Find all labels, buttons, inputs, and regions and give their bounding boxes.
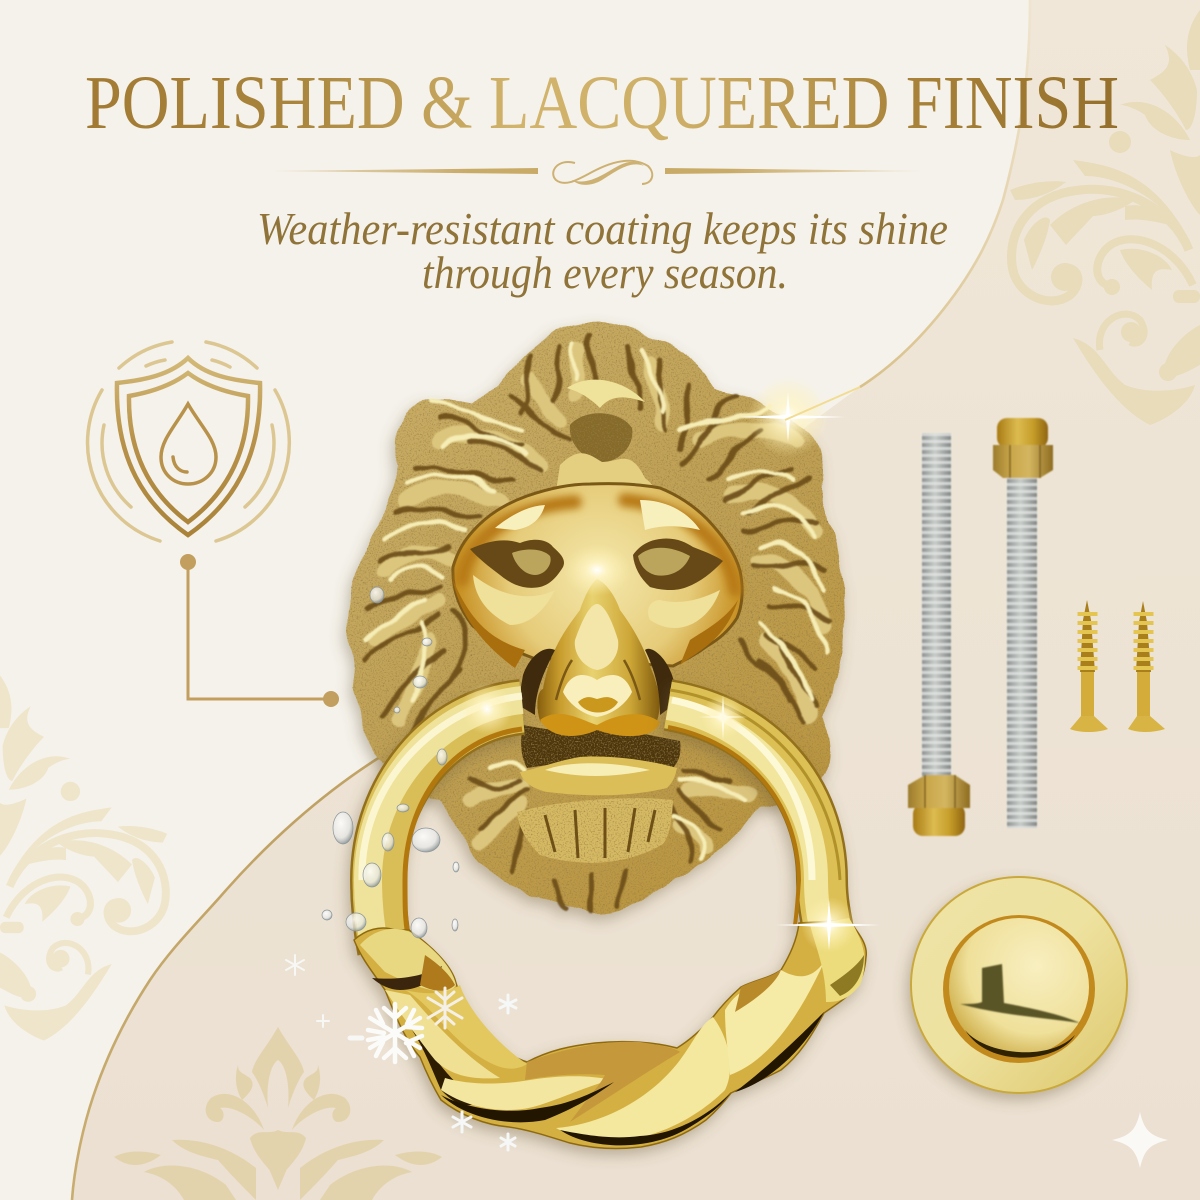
subtitle [257,204,948,298]
callout connector line [180,554,339,707]
mane highlight strands [365,345,825,860]
ring: twisted lower section [354,918,866,1148]
door knocker ring [354,690,866,1148]
decorative star bottom right [1112,1112,1168,1168]
damask ornament: top right [1010,10,1200,425]
brass wood screw left [1070,600,1108,732]
damask ornament: left side [0,675,167,1041]
damask ornament: bottom centre [114,1027,442,1200]
glint between the eyes [563,544,631,596]
icon: shield with water drop [88,342,289,541]
face mask [453,484,742,666]
water droplets [322,587,459,938]
beard [517,798,673,863]
left eye [470,540,564,588]
mouth shadow [521,725,681,768]
subtitle: Weather-resistant coating keeps its shine [257,204,948,254]
right eye [633,539,723,590]
nose bridge and snout [537,579,660,732]
subtitle: through every season. [422,248,788,298]
mane silhouette [348,322,845,914]
mounting bolt left [908,433,970,836]
lion head knocker [348,322,845,914]
ring: upper right arc [668,690,840,940]
sparkles on brass [461,377,880,953]
snowflakes [286,955,516,1150]
backplate rosette [911,877,1127,1093]
mane broad light locks [375,350,825,850]
title divider flourish [272,161,925,185]
brass wood screw right [1128,601,1165,732]
mane shadow strands [365,335,830,910]
lower lip [520,757,677,795]
forehead tuft [570,413,632,462]
forehead plate [555,453,654,500]
mounting bolt right [993,418,1053,828]
brow band [462,500,735,590]
cheek highlights [495,500,700,530]
ring: upper left arc [362,696,522,950]
